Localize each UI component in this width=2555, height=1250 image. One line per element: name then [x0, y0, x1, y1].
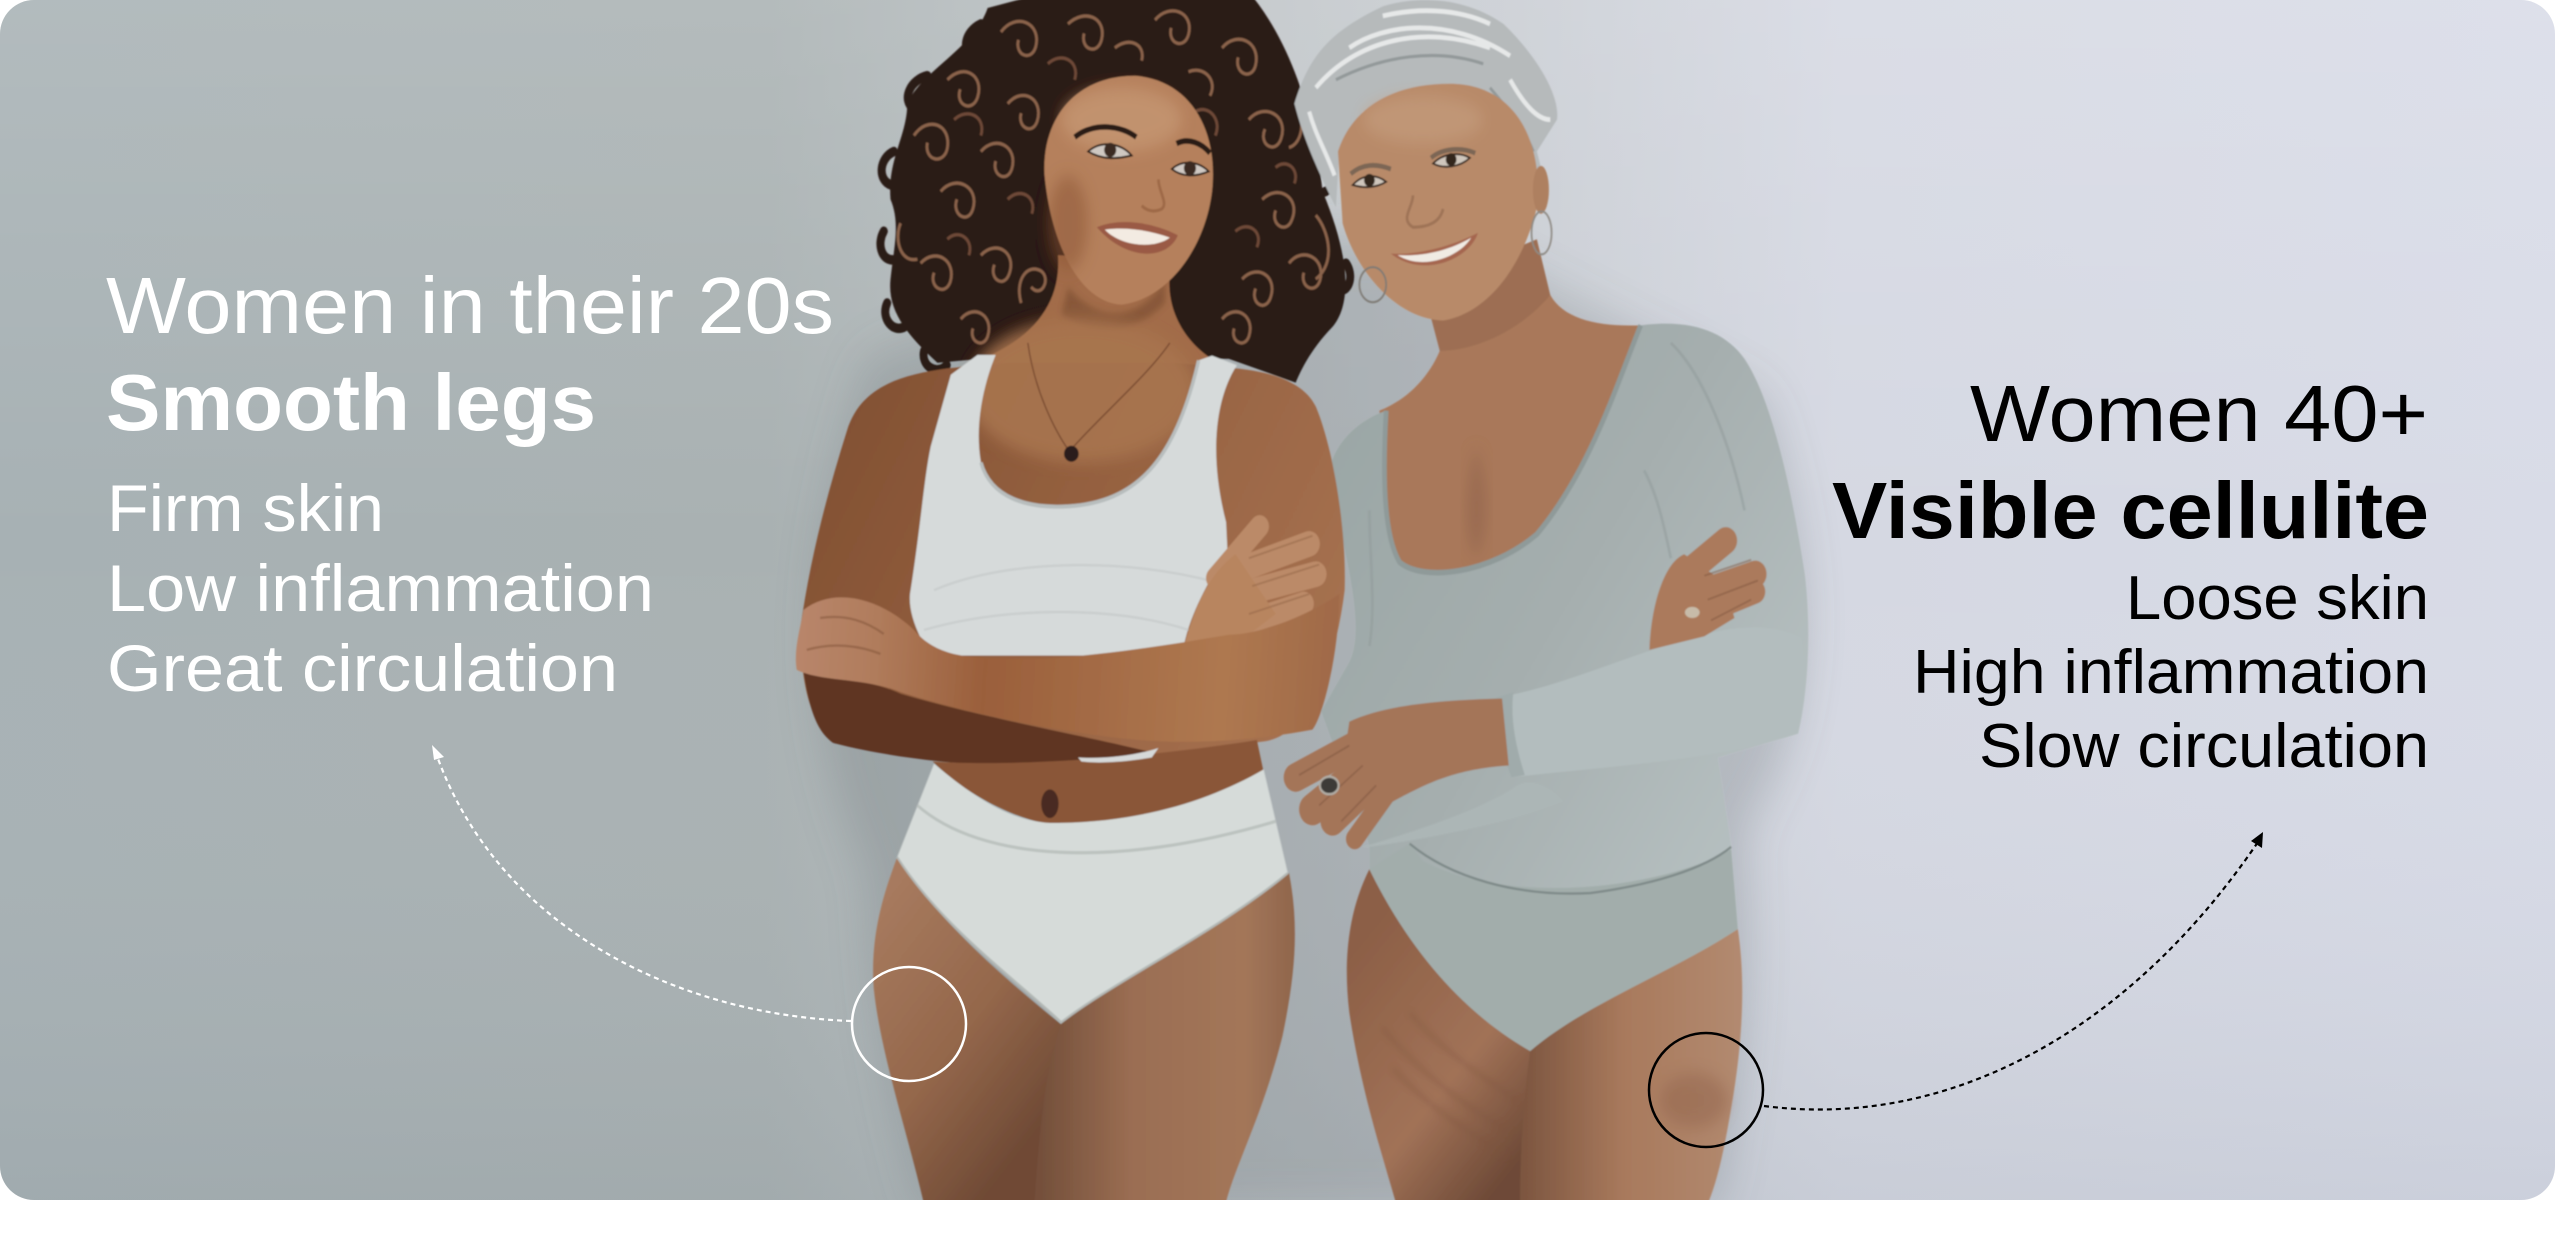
- hand on sleeve: [1681, 541, 1755, 614]
- brows and eyes: [1351, 149, 1475, 174]
- under arm: [803, 670, 1155, 767]
- arrow: cellulite leg to right text: [1764, 832, 2263, 1110]
- bottoms: [1431, 850, 1738, 1050]
- earrings: [1532, 211, 1552, 254]
- callout circle: cellulite leg: [1649, 1033, 1763, 1147]
- woman 1: young woman: [796, 0, 1350, 1204]
- sleeve forearm: [1512, 643, 1683, 776]
- white crop top: [910, 355, 1237, 655]
- item: loose skin: Loose skin: [2126, 564, 2429, 633]
- neck: [1423, 239, 1550, 351]
- item: slow circulation: Slow circulation: [1979, 712, 2429, 781]
- hair behind shoulders: [890, 0, 1346, 383]
- left leg: [1347, 869, 1532, 1204]
- necklace: [1028, 343, 1170, 451]
- neckline trim: [1384, 325, 1641, 573]
- chest highlight: [968, 319, 1195, 462]
- item: low inflammation: Low inflammation: [107, 551, 654, 625]
- ear: [1533, 166, 1549, 214]
- heading: Women 40+: [1970, 369, 2428, 458]
- neck: [960, 254, 1209, 368]
- item: high inflammation: High inflammation: [1913, 638, 2429, 707]
- bodysuit top: [1322, 323, 1808, 866]
- midriff: [933, 740, 1264, 825]
- lower hand: [1296, 738, 1393, 839]
- nose: [1407, 195, 1443, 227]
- white briefs: [897, 764, 1288, 1022]
- face: [1044, 76, 1213, 305]
- left hand knuckle lines: [807, 617, 884, 654]
- photo: two women: [796, 0, 1808, 1212]
- right hand fingers: [1215, 526, 1316, 626]
- face: [1338, 84, 1538, 321]
- cellulite streaks: [1383, 1013, 1517, 1156]
- crop top hem: [1078, 748, 1158, 762]
- woman 2: head and lower hand: [1294, 0, 1557, 839]
- torso and arms skin: [800, 363, 1345, 766]
- eyes and brows: [1075, 127, 1210, 153]
- ragged hair fringe: [880, 24, 1350, 370]
- item: great circulation: Great circulation: [107, 631, 618, 705]
- heading: Women in their 20s: [106, 261, 834, 350]
- chest skin: [1379, 295, 1641, 582]
- ring: [1685, 607, 1700, 618]
- cellulite patch: [1661, 1073, 1728, 1128]
- bold heading: visible cellulite: Visible cellulite: [1832, 466, 2429, 555]
- mouth: [1097, 222, 1178, 254]
- right leg: [1520, 929, 1742, 1204]
- nose shadow: [1142, 179, 1164, 211]
- forearm across: [796, 594, 1339, 742]
- navel ring: [1041, 789, 1059, 818]
- lower sleeve: [1376, 839, 1393, 844]
- woman 2: body: [1321, 295, 1808, 1204]
- wall shadow behind figures: [814, 239, 1805, 1212]
- callout circle: smooth leg: [852, 967, 966, 1081]
- text block: women in their 20s: [106, 261, 834, 705]
- copper curls: [898, 11, 1329, 343]
- hair: [1294, 0, 1557, 207]
- bold heading: smooth legs: Smooth legs: [106, 358, 596, 447]
- wedding ring: [1320, 777, 1339, 794]
- legs: [873, 857, 1061, 1204]
- arm sleeve seams: [1644, 343, 1746, 558]
- mouth: [1391, 233, 1478, 265]
- arrow: smooth leg to left text: [432, 745, 851, 1021]
- text block: women 40+: [1832, 369, 2429, 781]
- item: firm skin: Firm skin: [107, 471, 384, 545]
